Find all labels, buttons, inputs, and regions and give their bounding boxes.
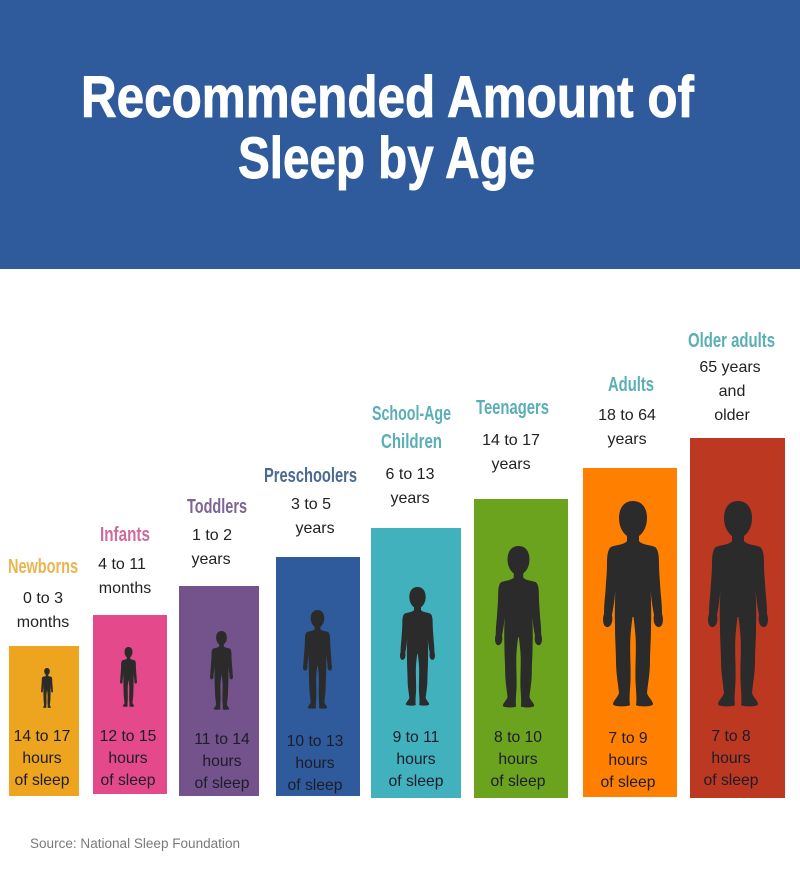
column: school-age children: years [390, 490, 430, 507]
column: teenagers: Teenagers [476, 397, 549, 419]
column: school-age children: 9 to 11 [393, 729, 439, 746]
column: newborns: 14 to 17 [14, 728, 70, 745]
column: toddlers: 1 to 2 [192, 527, 232, 544]
column: toddlers: 11 to 14 [194, 731, 250, 748]
column: newborns: 0 to 3 [23, 590, 63, 607]
column: infants: 4 to 11 [98, 556, 146, 573]
column: older adults: 7 to 8 [711, 728, 751, 745]
column: school-age children [371, 403, 461, 798]
column: preschoolers: 10 to 13 [287, 733, 344, 750]
column: adults [583, 374, 677, 797]
column: preschoolers: 3 to 5 [291, 496, 331, 513]
column: older adults: older [714, 407, 750, 424]
column: preschoolers: years [295, 520, 335, 537]
source note: Source: National Sleep Foundation [30, 836, 240, 851]
title [81, 65, 695, 191]
column: adults: 7 to 9 [608, 730, 648, 747]
column: infants: months [99, 580, 151, 597]
column: newborns: months [17, 614, 69, 631]
column: school-age children: of sleep [389, 773, 444, 790]
column: older adults: of sleep [704, 772, 759, 789]
column: preschoolers: hours [295, 755, 335, 772]
column: adults: of sleep [601, 774, 656, 791]
column: adults: years [607, 431, 647, 448]
column: newborns: Newborns [8, 556, 78, 578]
column: preschoolers: Preschoolers [264, 465, 357, 487]
column: older adults: hours [711, 750, 751, 767]
column: infants: 12 to 15 [100, 728, 157, 745]
title: Sleep by Age [238, 126, 535, 191]
column: adults: 18 to 64 [598, 407, 656, 424]
title: Recommended Amount of [81, 65, 695, 130]
column: infants: hours [108, 750, 148, 767]
column: newborns: hours [22, 750, 62, 767]
column: older adults: and [719, 383, 745, 400]
column: infants: of sleep [101, 772, 156, 789]
column: preschoolers: of sleep [288, 777, 343, 794]
column: teenagers: 14 to 17 [482, 432, 540, 449]
column: toddlers: years [191, 551, 231, 568]
column: teenagers [474, 397, 568, 798]
column: newborns [8, 556, 79, 796]
column: toddlers: Toddlers [187, 496, 247, 518]
column: school-age children: School-Age [372, 403, 451, 425]
column: infants [93, 524, 167, 794]
column: teenagers: hours [498, 751, 538, 768]
column: preschoolers [264, 465, 360, 796]
column: toddlers [179, 496, 259, 796]
column: toddlers: hours [202, 753, 242, 770]
column: infants: Infants [100, 524, 150, 546]
column: teenagers: 8 to 10 [494, 729, 542, 746]
column: newborns: of sleep [15, 772, 70, 789]
column: school-age children: Children [381, 431, 442, 453]
column: school-age children: hours [396, 751, 436, 768]
column: toddlers: of sleep [195, 775, 250, 792]
column: older adults: 65 years [699, 359, 761, 376]
column: school-age children: 6 to 13 [386, 466, 435, 483]
column: adults: hours [608, 752, 648, 769]
column: teenagers: years [491, 456, 531, 473]
column: teenagers: of sleep [491, 773, 546, 790]
column: older adults [688, 330, 785, 798]
column: adults: Adults [608, 374, 654, 396]
header banner [0, 0, 800, 269]
